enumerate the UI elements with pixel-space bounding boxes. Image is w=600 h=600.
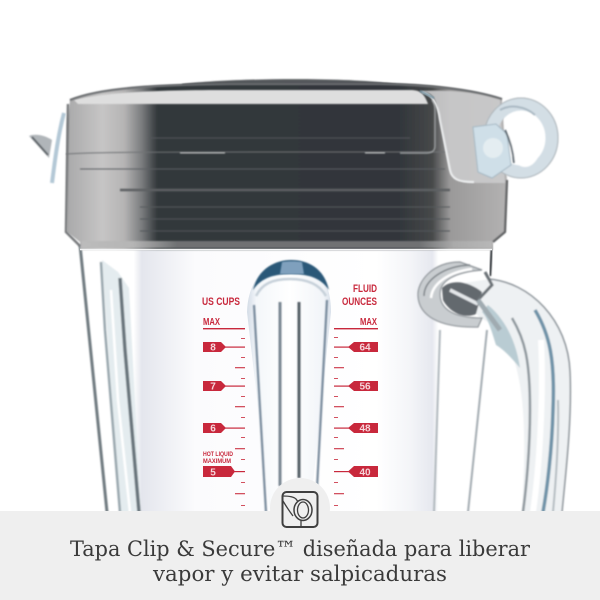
measurement scale: fluid ounces: 64 xyxy=(359,342,371,354)
lid base band xyxy=(82,241,492,248)
heading: fluid ounces: FLUID xyxy=(353,283,377,295)
measurement scale: US cups xyxy=(202,296,245,506)
measurement scale: US cups: 7 xyxy=(210,382,216,392)
lid body xyxy=(67,83,507,250)
caption text: vapor y evitar salpicaduras xyxy=(152,562,447,586)
icon: lid clip xyxy=(270,478,330,538)
right jar ribs xyxy=(434,330,487,512)
central post xyxy=(247,260,331,512)
measurement scale: fluid ounces: 56 xyxy=(359,382,371,392)
measurement scale: US cups: MAX xyxy=(203,317,220,328)
lid top cap xyxy=(182,79,396,92)
lid clear flap xyxy=(420,91,505,183)
measurement scale: fluid ounces: 48 xyxy=(359,424,371,434)
lid ridge lines xyxy=(66,138,450,231)
measurement scale: US cups: 5 xyxy=(210,468,216,478)
loop handle xyxy=(473,98,558,178)
heading: US cups: US CUPS xyxy=(202,296,240,308)
measurement scale: fluid ounces: OUNCES xyxy=(342,296,377,308)
measurement scale: fluid ounces: MAX xyxy=(360,317,377,328)
lid top light band xyxy=(74,90,428,104)
caption panel xyxy=(0,478,600,600)
measurement scale: US cups: 6 xyxy=(210,424,216,434)
left jar rib xyxy=(101,260,141,512)
handle xyxy=(418,262,570,512)
left latch xyxy=(29,113,64,183)
measurement scale: US cups: HOT LIQUID xyxy=(203,452,234,458)
measurement scale: US cups: MAXIMUM xyxy=(203,459,231,465)
caption text: Tapa Clip & Secure™ diseñada para liberar xyxy=(70,537,531,561)
measurement scale: US cups: 8 xyxy=(210,342,216,354)
handle mount xyxy=(418,262,482,327)
measurement scale: fluid ounces: 40 xyxy=(359,468,371,478)
lid xyxy=(29,79,558,250)
measurement scale: fluid ounces xyxy=(334,283,378,506)
caption text xyxy=(70,537,531,586)
jar body xyxy=(80,245,492,512)
